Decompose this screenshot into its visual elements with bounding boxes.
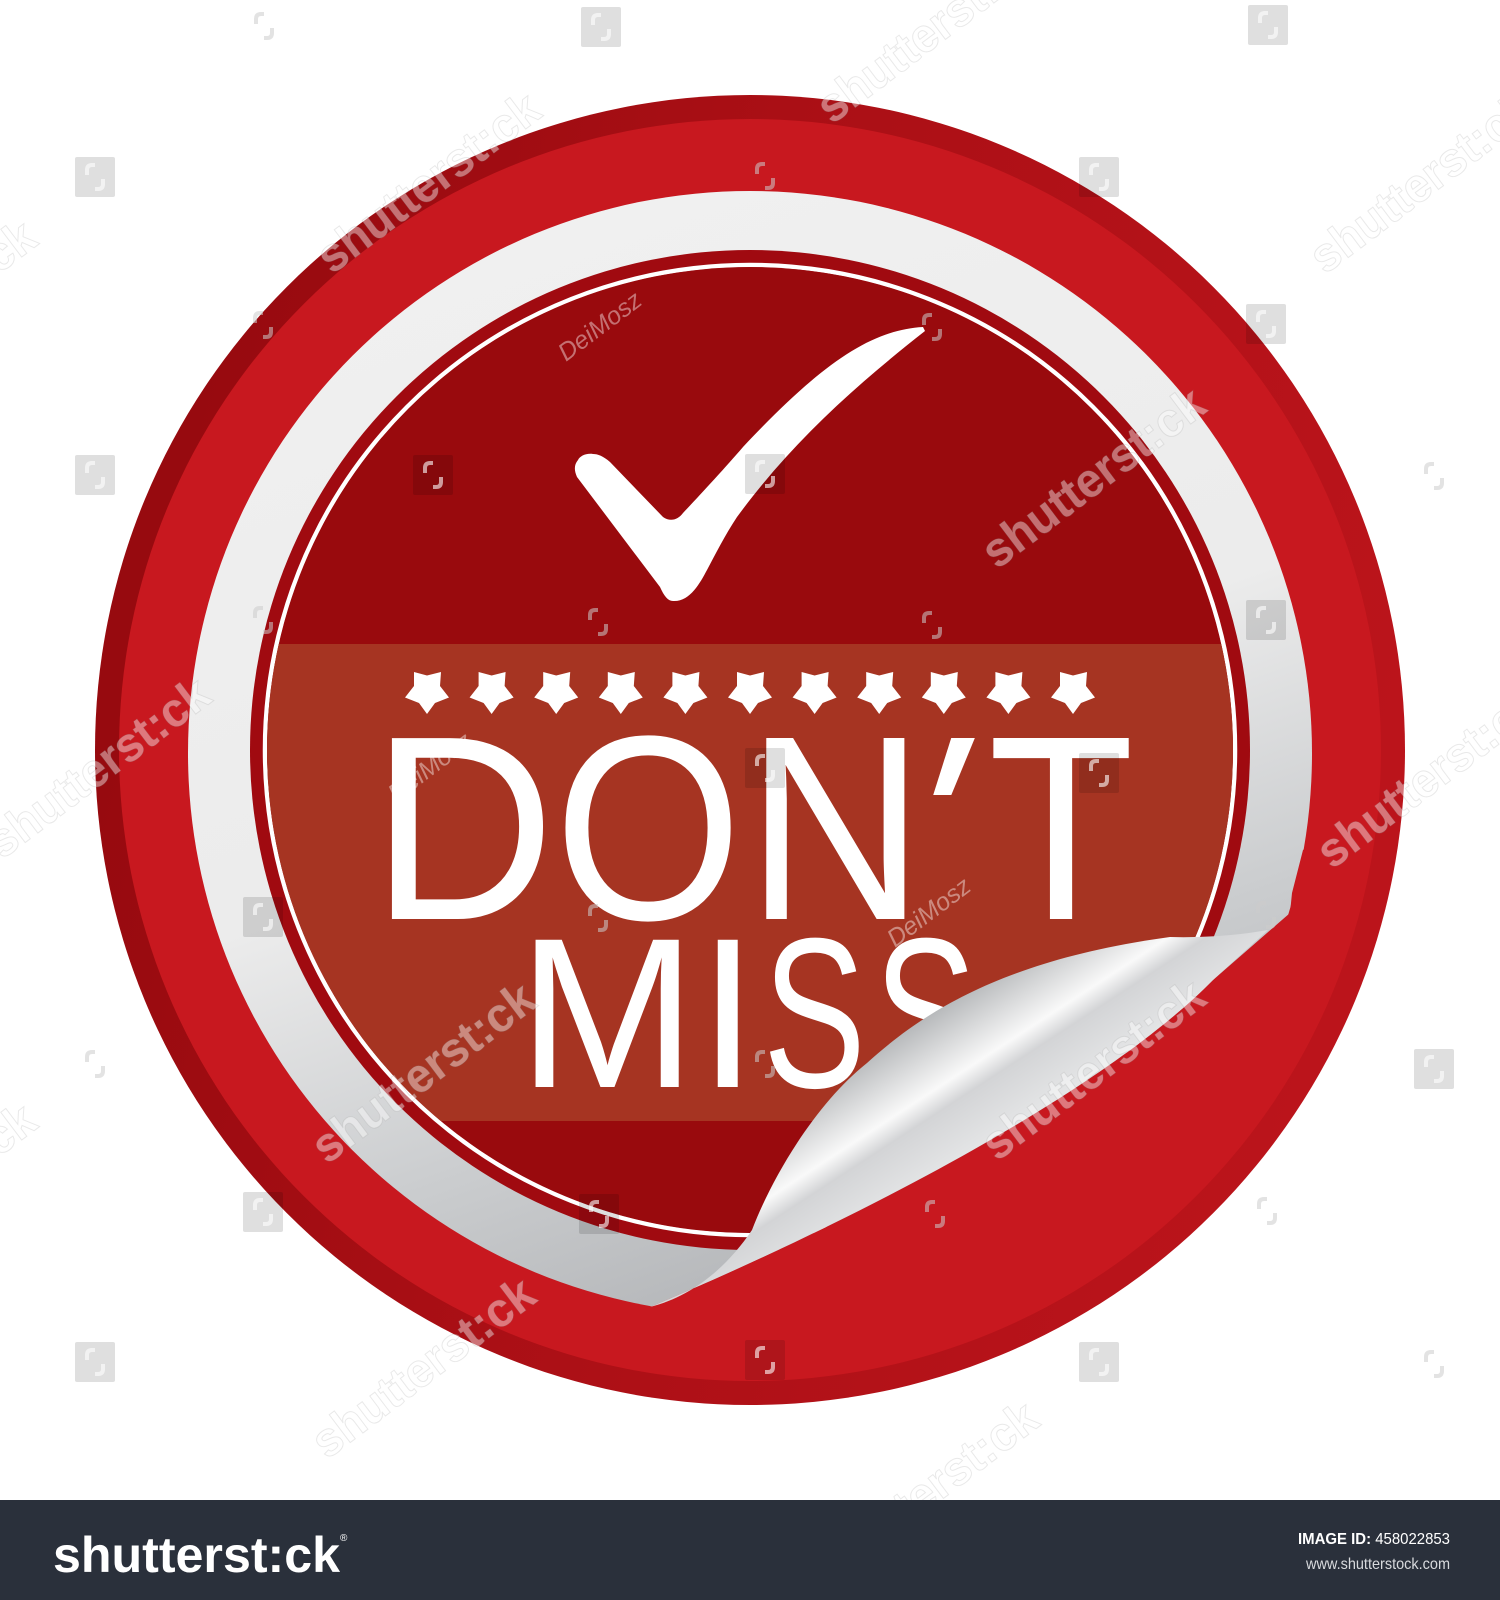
heading: MISS: S [763,893,866,1133]
heading: DON'T: O [554,681,742,975]
stock watermarks: DeiMosz [882,872,977,953]
stock watermarks: DeiMosz [383,727,478,808]
row of stars [405,672,1095,714]
silver ring [188,191,1312,1315]
heading: DON'T: N [746,682,925,976]
stock watermarks: shutterst:ck [302,1267,545,1469]
icon: check mark [575,327,925,601]
heading: MISS: M [518,894,696,1133]
heading: DON'T: T [988,682,1134,975]
heading: MISS: S [874,893,977,1133]
watermark squares [75,5,1454,1382]
dark red inner ring [250,250,1250,1250]
central dark red disc with band [250,250,1250,1250]
stock watermarks: shutterst:ck [972,969,1215,1171]
watermark loose swirl marks [87,14,1442,1376]
footer bar [0,1500,1500,1600]
peeled sticker face [188,191,1312,1315]
thin white ring [265,265,1235,1235]
stock watermarks: shutterst:ck [302,972,545,1174]
heading: DON'T [392,735,1129,922]
heading: DON'T: ' [852,681,1009,975]
footer image id [1298,1531,1450,1573]
stock watermarks: shutterst:ck [307,82,550,284]
footer image id: IMAGE ID: 458022853 [1298,1531,1450,1548]
footer image id: www.shutterstock.com [1305,1556,1450,1573]
sticker base: red disc [95,95,1405,1405]
stock watermarks: shutterst:ck [805,1391,1048,1593]
stock watermarks: DeiMosz [553,286,648,367]
silver page-curl flap [650,930,1268,1307]
heading: MISS: I [698,894,757,1133]
heading: MISS [536,938,968,1090]
heading: DON'T: D [371,680,555,975]
footer logo: ® [340,1533,348,1544]
stock watermarks: shutterst:ck [972,377,1215,579]
footer logo: shutterst:ck [53,1527,340,1583]
watermark swirl marks inside squares [87,13,1442,1374]
